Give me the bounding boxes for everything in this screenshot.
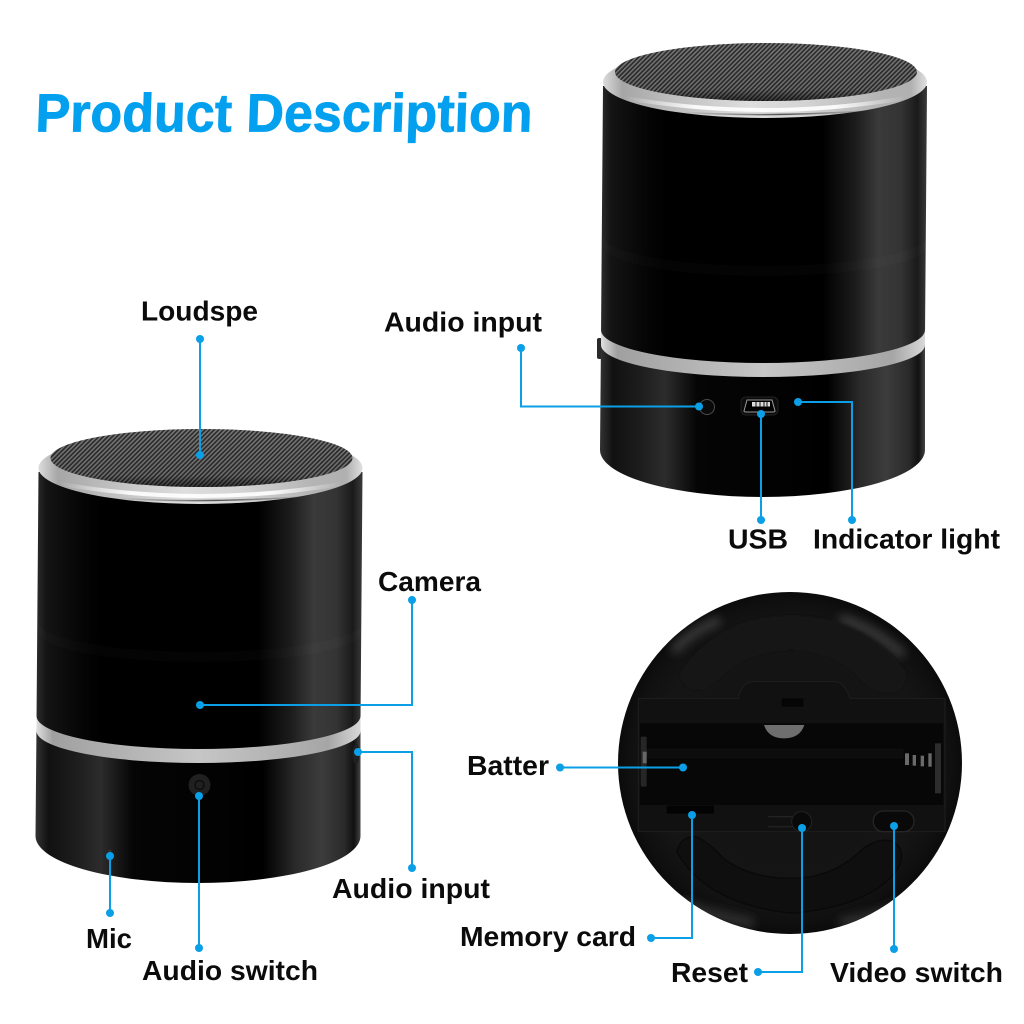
- memory card slot: [667, 806, 714, 814]
- left contact: [641, 737, 647, 787]
- callout: Video switch: Video switch: [830, 957, 1003, 988]
- callout: USB: USB: [728, 524, 788, 554]
- callout: Mic: [86, 852, 132, 954]
- callout: Audio input (top): Audio input: [384, 306, 542, 338]
- video switch: [873, 811, 914, 832]
- callout: Camera: Camera: [378, 566, 481, 597]
- lower crescent foot: [677, 837, 901, 913]
- outer ring highlights: [673, 620, 720, 652]
- power button: [188, 774, 210, 796]
- battery plate: [638, 682, 945, 832]
- callout: Audio input (top): [384, 306, 703, 410]
- reset button: [768, 812, 812, 832]
- side audio jack: [352, 744, 360, 764]
- mic hole: [108, 850, 112, 852]
- battery bay: [640, 723, 943, 805]
- callout: Indicator light: Indicator light: [813, 524, 1000, 554]
- callout: Audio switch: Audio switch: [142, 955, 318, 986]
- callout: Video switch: [830, 822, 1003, 988]
- callout: Memory card: Memory card: [460, 921, 636, 952]
- callout: Audio input (lower): [332, 748, 490, 904]
- audio jack: [700, 400, 714, 414]
- battery highlight: [647, 748, 903, 758]
- speaker: underside view: [618, 592, 962, 934]
- callout: Loudspe: Loudspe: [141, 296, 258, 326]
- callout: Audio switch: [142, 792, 318, 986]
- USB port: [741, 397, 778, 415]
- sticker: [764, 725, 804, 738]
- callout: Reset: [671, 824, 806, 988]
- callout: Mic: Mic: [86, 923, 132, 954]
- speaker: top right, back view: [597, 43, 927, 497]
- callout: USB: [728, 410, 788, 554]
- right spring contact: [905, 743, 941, 793]
- callout: Camera: [196, 566, 481, 709]
- plate notch: [782, 698, 803, 707]
- callout: Loudspe: [141, 296, 258, 459]
- callout: Reset: Reset: [671, 957, 748, 988]
- callout: Audio input (lower): Audio input: [332, 873, 490, 904]
- upper crescent foot: [841, 624, 894, 657]
- callout: Batter: [467, 750, 687, 781]
- speaker: left, front view: [36, 429, 362, 883]
- side button: [597, 338, 602, 359]
- title: Product Description: [35, 84, 534, 143]
- callout: Memory card: [460, 811, 696, 952]
- callout: Batter: Batter: [467, 750, 549, 781]
- speaker body: [600, 43, 927, 497]
- callout: Indicator light: [794, 398, 1000, 554]
